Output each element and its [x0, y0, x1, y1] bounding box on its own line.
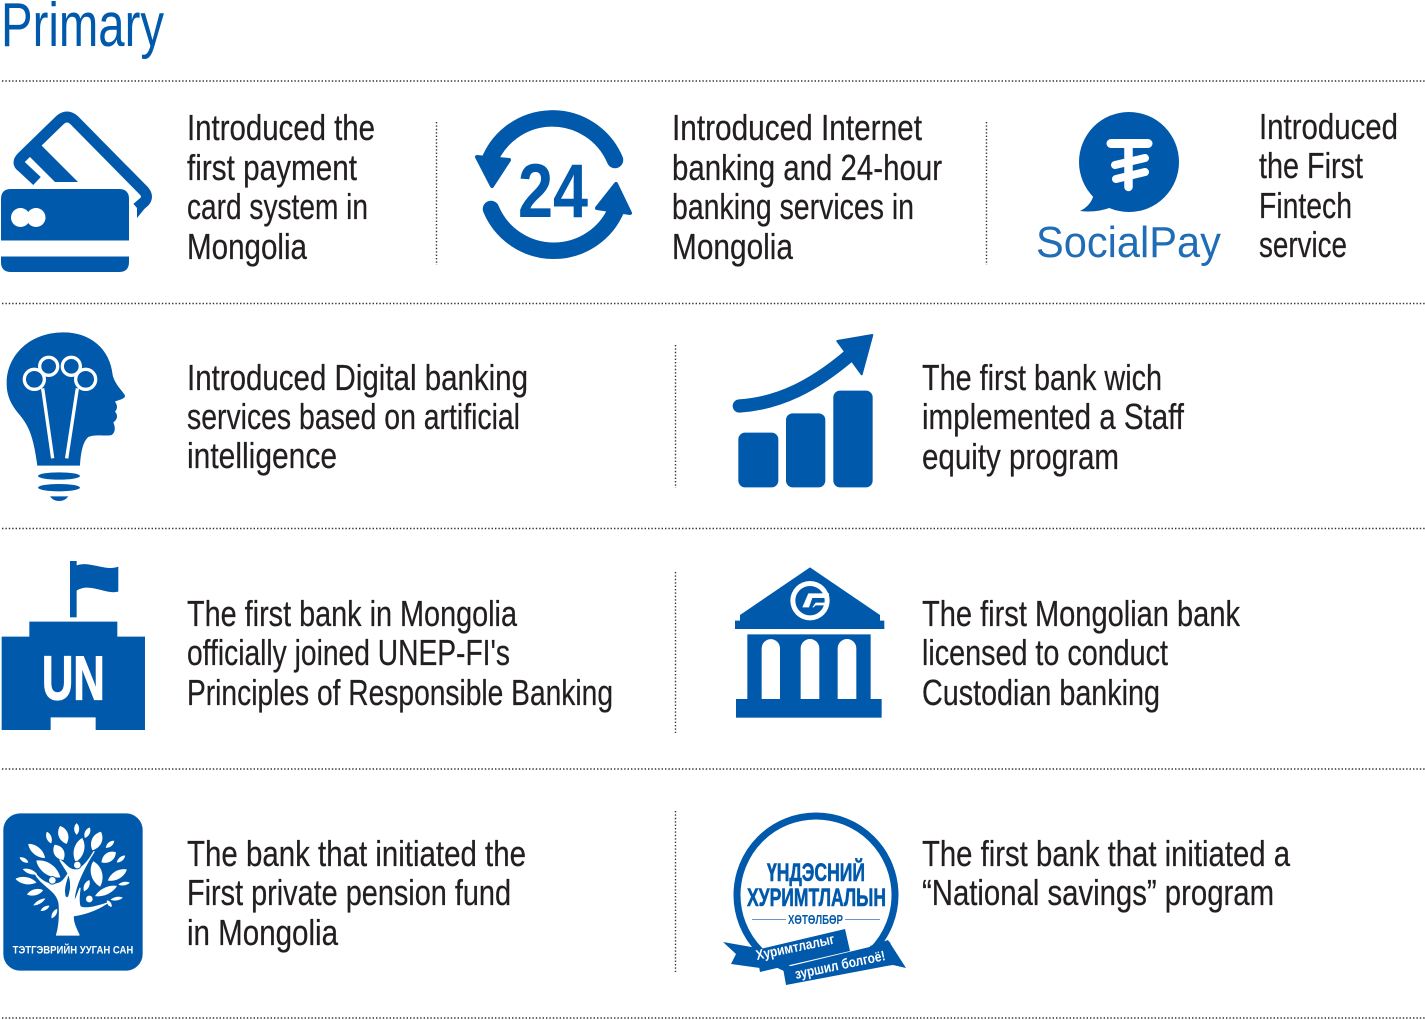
- text: fintech service: service: [1259, 224, 1347, 265]
- icon: 24-hour cycle: 24: [518, 149, 588, 234]
- text: internet banking: Introduced Internet: [672, 107, 922, 148]
- text: internet banking: banking and 24-hour: [672, 147, 942, 188]
- text: digital banking: Introduced Digital banking: [187, 357, 528, 398]
- panel: UNEP-FI: [2, 561, 613, 730]
- text: pension fund: The bank that initiated the: [187, 833, 526, 874]
- panel: SocialPay fintech: [1036, 106, 1398, 267]
- text: payment card: Introduced the: [187, 107, 375, 148]
- panel: first payment card system: [1, 107, 375, 272]
- panel: internet banking 24-hour: [477, 107, 942, 267]
- panel: staff equity program: [738, 335, 1185, 487]
- icon: bank building: [735, 567, 884, 718]
- icon: national savings badge: ХӨТӨЛБӨР: [788, 912, 843, 927]
- panel: digital banking AI: [7, 332, 528, 501]
- text: payment card: first payment: [187, 147, 357, 188]
- icon: national savings badge: Хуримтлалыг: [754, 931, 836, 963]
- icon: SocialPay logo: [1036, 112, 1221, 267]
- icon: national savings badge: [723, 816, 906, 985]
- text: staff equity: [922, 357, 1185, 477]
- icon: national savings badge: ҮНДЭСНИЙ: [767, 857, 865, 887]
- text: staff equity: implemented a Staff: [922, 396, 1185, 437]
- panel: custodian banking: [735, 567, 1241, 718]
- text: UNEP-FI: [187, 593, 613, 713]
- text: fintech service: the First: [1259, 145, 1363, 186]
- text: custodian: licensed to conduct: [922, 632, 1168, 673]
- text: fintech service: Introduced: [1259, 106, 1398, 147]
- text: custodian: Custodian banking: [922, 672, 1160, 713]
- text: pension fund: [187, 833, 526, 953]
- icon: growth bars and arrow: [738, 335, 873, 487]
- text: staff equity: equity program: [922, 436, 1119, 477]
- icon: 24-hour cycle: [477, 118, 630, 251]
- text: UNEP-FI: Principles of Responsible Banking: [187, 672, 613, 713]
- text: internet banking: Mongolia: [672, 226, 794, 267]
- text: payment card: card system in: [187, 186, 368, 227]
- text: digital banking: services based on artificial: [187, 396, 520, 437]
- text: national savings: The first bank that initiated a: [922, 833, 1291, 874]
- text: payment card: Mongolia: [187, 226, 308, 267]
- text: fintech service: [1259, 106, 1398, 265]
- icon: pension fund tree logo: [3, 813, 143, 971]
- text: UNEP-FI: The first bank in Mongolia: [187, 593, 518, 634]
- text: fintech service: Fintech: [1259, 185, 1352, 226]
- icon: SocialPay logo: SocialPay: [1036, 218, 1221, 267]
- icon: national savings badge: зуршил болгоё!: [793, 947, 887, 982]
- text: payment card: [187, 107, 375, 267]
- text: custodian: [922, 593, 1241, 713]
- icon: pension fund tree logo: ТЭТГЭВРИЙН УУГАН САН: [13, 943, 133, 956]
- text: digital banking: [187, 357, 528, 476]
- text: pension fund: in Mongolia: [187, 912, 339, 953]
- icon: national savings badge: ХУРИМТЛАЛЫН: [747, 884, 886, 912]
- icon: light bulb head: [7, 332, 125, 501]
- text: national savings: [922, 833, 1291, 913]
- text: national savings: “National savings” program: [922, 872, 1274, 913]
- text: custodian: The first Mongolian bank: [922, 593, 1241, 634]
- icon: UN building with flag: [2, 561, 145, 730]
- text: pension fund: First private pension fund: [187, 872, 511, 913]
- text: internet banking: [672, 107, 942, 267]
- text: staff equity: The first bank wich: [922, 357, 1162, 398]
- text: digital banking: intelligence: [187, 435, 337, 476]
- text: internet banking: banking services in: [672, 186, 914, 227]
- text: UNEP-FI: officially joined UNEP-FI's: [187, 632, 510, 673]
- icon: payment cards: [1, 117, 150, 272]
- panel: national savings: [723, 816, 1291, 985]
- icon: UN building with flag: UN: [42, 644, 105, 713]
- panel: private pension fund: [3, 813, 526, 971]
